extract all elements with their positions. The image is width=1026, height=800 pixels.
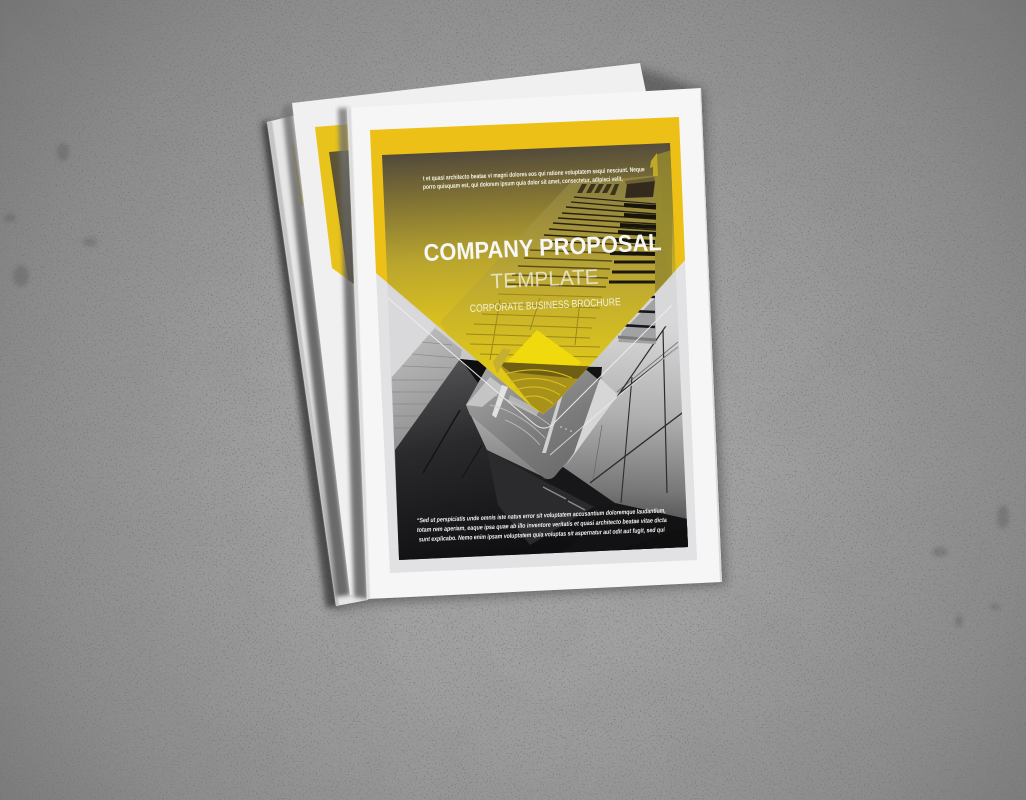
right page edge — [700, 88, 722, 582]
light strips on wedge — [543, 487, 585, 510]
dark contact shadow on left — [262, 122, 340, 608]
block underside panel — [487, 450, 595, 545]
side above tower — [655, 150, 672, 294]
tagline: corporate business brochure: CORPORATE BUSINESS BROCHURE — [470, 296, 621, 315]
top intro text — [423, 166, 645, 191]
bottom quote text: sunt explicabo. Nemo enim ipsam voluptatem quia voluptas sit aspernatur aut odit aut fugit, sed qui — [419, 527, 665, 543]
light veil right — [664, 320, 670, 326]
glass block — [466, 362, 602, 479]
light grey inner panel — [376, 260, 697, 573]
shadow cast on back brochure — [282, 103, 350, 597]
subtitle: template: TEMPLATE — [490, 266, 599, 293]
bright yellow diamond — [507, 330, 581, 366]
middle brochure yellow panel — [315, 124, 354, 284]
dark window bars outside chevron — [624, 296, 656, 328]
bottom right darkening — [617, 527, 688, 550]
back brochure — [267, 114, 368, 606]
left facade — [392, 328, 462, 424]
front brochure — [347, 88, 722, 599]
middle brochure — [282, 63, 646, 597]
dark building mass — [395, 359, 692, 562]
structural lines — [423, 320, 682, 503]
title: company proposal: COMPANY PROPOSAL — [423, 229, 662, 267]
figure one mark — [650, 153, 658, 176]
window in the yellow tip — [501, 362, 589, 414]
brochure cover sheet — [347, 88, 722, 599]
right glass wall base — [388, 271, 688, 560]
tower top block — [625, 181, 655, 198]
cover photo — [388, 271, 688, 560]
light veil left — [390, 325, 434, 377]
soft shadow under the stack — [264, 68, 726, 611]
bottom quote text — [417, 508, 667, 543]
shadow cast by front brochure — [338, 108, 368, 599]
bottom quote text: “Sed ut perspiciatis unde omnis iste natus error sit voluptatem accusantium doloremque laudantium, — [417, 508, 666, 524]
glass column — [542, 396, 562, 453]
black wedge — [545, 467, 615, 506]
top intro text: porro quisquam est, qui dolorem ipsum quia dolor sit amet, consectetur, adipisci velit, — [423, 176, 623, 191]
yellow chevron panel — [370, 117, 690, 430]
middle brochure photo edge — [329, 150, 354, 284]
top intro text: t et quasi architecto beatae vi magni dolores eos qui ratione voluptatem sequi nesciunt. Neque — [423, 166, 645, 182]
photo tinted yellow — [382, 143, 676, 414]
glass reflections — [466, 377, 505, 407]
bottom quote text: totam rem aperiam, eaque ipsa quae ab illo inventore veritatis et quasi architecto beatae vitae dicta — [417, 517, 667, 534]
window rows — [540, 197, 656, 246]
thin white chevron lines — [388, 298, 678, 455]
tower windows in grey zone — [618, 298, 656, 344]
light band beside block — [565, 378, 618, 467]
tower silhouette — [440, 175, 672, 420]
